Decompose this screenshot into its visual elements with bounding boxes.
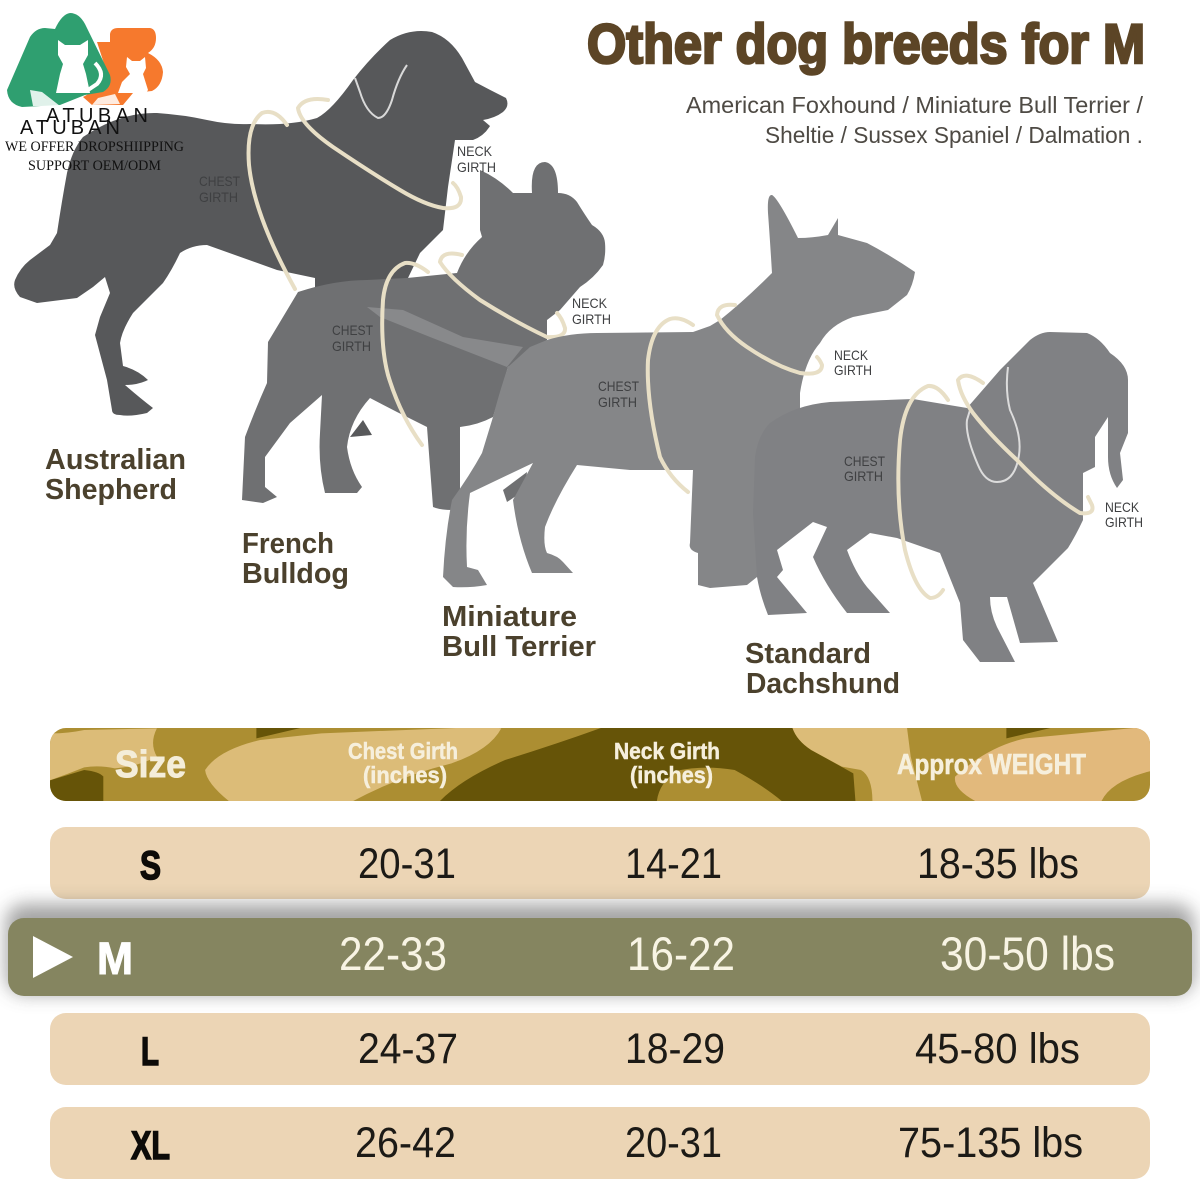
chest girth label <box>199 173 240 205</box>
breed name: Australian Shepherd: Shepherd <box>45 474 177 506</box>
row XL: XL <box>131 1124 170 1168</box>
white cat <box>56 40 90 93</box>
logo: brand text: ATUBAN <box>20 117 120 139</box>
collar shadow strip <box>367 307 523 367</box>
row S: 20-31 <box>358 840 456 888</box>
neck girth labels: GIRTH <box>834 362 872 378</box>
header label: Approx WEIGHT: Approx WEIGHT <box>897 749 1086 781</box>
row M: highlighted: 30-50 lbs <box>940 927 1115 980</box>
logo: brand text: SUPPORT OEM/ODM <box>28 158 161 174</box>
neck girth ring <box>298 99 461 208</box>
logo: brand text <box>5 105 184 174</box>
neck girth labels: GIRTH <box>572 311 611 327</box>
neck girth ring <box>717 305 822 374</box>
chest girth label: CHEST <box>332 322 373 338</box>
chest girth label <box>332 322 373 354</box>
breed name: Standard Dachshund: Dachshund <box>746 668 900 700</box>
dog: Miniature Bull Terrier silhouette <box>443 195 915 588</box>
neck girth labels: GIRTH <box>457 159 496 175</box>
row XL: 20-31 <box>625 1119 722 1167</box>
neck girth ring <box>440 254 565 337</box>
header label: Neck Girth: (inches) <box>630 762 713 788</box>
dog: French Bulldog silhouette <box>242 162 605 510</box>
chest girth label <box>598 378 639 410</box>
row M: highlighted: 16-22 <box>627 927 735 980</box>
chest girth ring <box>898 386 948 598</box>
neck girth labels: NECK <box>572 295 608 311</box>
row XL: 26-42 <box>355 1119 456 1167</box>
neck girth labels: NECK <box>834 347 869 363</box>
chest girth label: GIRTH <box>199 189 238 205</box>
header label: Chest Girth: (inches) <box>363 762 447 788</box>
breed name: Miniature Bull Terrier <box>442 601 596 663</box>
row XL <box>50 1107 1150 1179</box>
breed name: Australian Shepherd: Australian <box>45 444 186 476</box>
chest girth label: GIRTH <box>598 394 637 410</box>
small cat <box>118 57 148 93</box>
arrow marker <box>33 936 73 978</box>
neck girth labels <box>457 143 1143 530</box>
row M: highlighted: 22-33 <box>339 927 447 980</box>
white tail <box>88 63 101 90</box>
row L: L <box>141 1030 159 1074</box>
header label: Neck Girth: Neck Girth <box>614 738 720 764</box>
logo: brand text: ATUBAN <box>46 105 148 127</box>
breed name: Standard Dachshund <box>745 638 900 700</box>
header label: Size: Size <box>115 744 186 786</box>
row S: 14-21 <box>625 840 722 888</box>
breed name: Australian Shepherd <box>45 444 186 506</box>
row L: 45-80 lbs <box>915 1025 1080 1073</box>
dog: Standard Dachshund silhouette <box>753 332 1128 662</box>
chest girth label: CHEST <box>598 378 639 394</box>
neck girth labels: NECK <box>1105 499 1140 515</box>
green shape <box>7 13 111 107</box>
breed name: Miniature Bull Terrier: Miniature <box>442 601 577 633</box>
breed name: Standard Dachshund: Standard <box>745 638 871 670</box>
neck girth labels: GIRTH <box>1105 514 1143 530</box>
chest girth label: GIRTH <box>332 338 371 354</box>
chest girth label: CHEST <box>199 173 240 189</box>
subtitle: other breeds: Sheltie / Sussex Spaniel / Dalmation . <box>765 122 1143 148</box>
camouflage pattern <box>46 727 1156 803</box>
row S <box>50 827 1150 899</box>
breed name: French Bulldog: French <box>242 528 334 560</box>
chest girth label: GIRTH <box>844 468 883 484</box>
header label: Chest Girth: Chest Girth <box>348 738 458 764</box>
row S: 18-35 lbs <box>917 840 1079 888</box>
ear line <box>355 65 407 118</box>
header label: Neck Girth <box>614 738 720 788</box>
chest girth label <box>844 453 885 484</box>
subtitle: other breeds <box>686 92 1144 148</box>
chest girth ring <box>648 318 693 492</box>
neck girth ring <box>958 376 1092 513</box>
neck girth labels: NECK <box>457 143 493 159</box>
breed name: French Bulldog: Bulldog <box>242 558 349 590</box>
orange shape <box>83 28 163 105</box>
table header: camouflage band <box>46 727 1156 803</box>
row L <box>50 1013 1150 1085</box>
header label: Chest Girth <box>348 738 458 788</box>
breed name: Miniature Bull Terrier: Bull Terrier <box>442 631 596 663</box>
title: Other dog breeds for M <box>587 12 1145 75</box>
row S: S <box>140 844 161 888</box>
row M: highlighted: M <box>97 933 133 984</box>
subtitle: other breeds: American Foxhound / Miniature Bull Terrier / <box>686 92 1144 118</box>
row M: highlighted <box>6 904 1194 996</box>
bottom pets <box>30 90 120 106</box>
row L: 24-37 <box>358 1025 458 1073</box>
ear line <box>967 367 1020 482</box>
chest girth ring <box>249 112 295 289</box>
chest girth label: CHEST <box>844 453 885 469</box>
logo: brand mark <box>7 13 163 107</box>
breed name: French Bulldog <box>242 528 349 590</box>
chest girth ring <box>382 263 428 445</box>
dog: Australian Shepherd silhouette <box>14 31 507 416</box>
logo: brand text: WE OFFER DROPSHIIPPING <box>5 139 184 155</box>
row XL: 75-135 lbs <box>898 1119 1083 1167</box>
row L: 18-29 <box>625 1025 725 1073</box>
